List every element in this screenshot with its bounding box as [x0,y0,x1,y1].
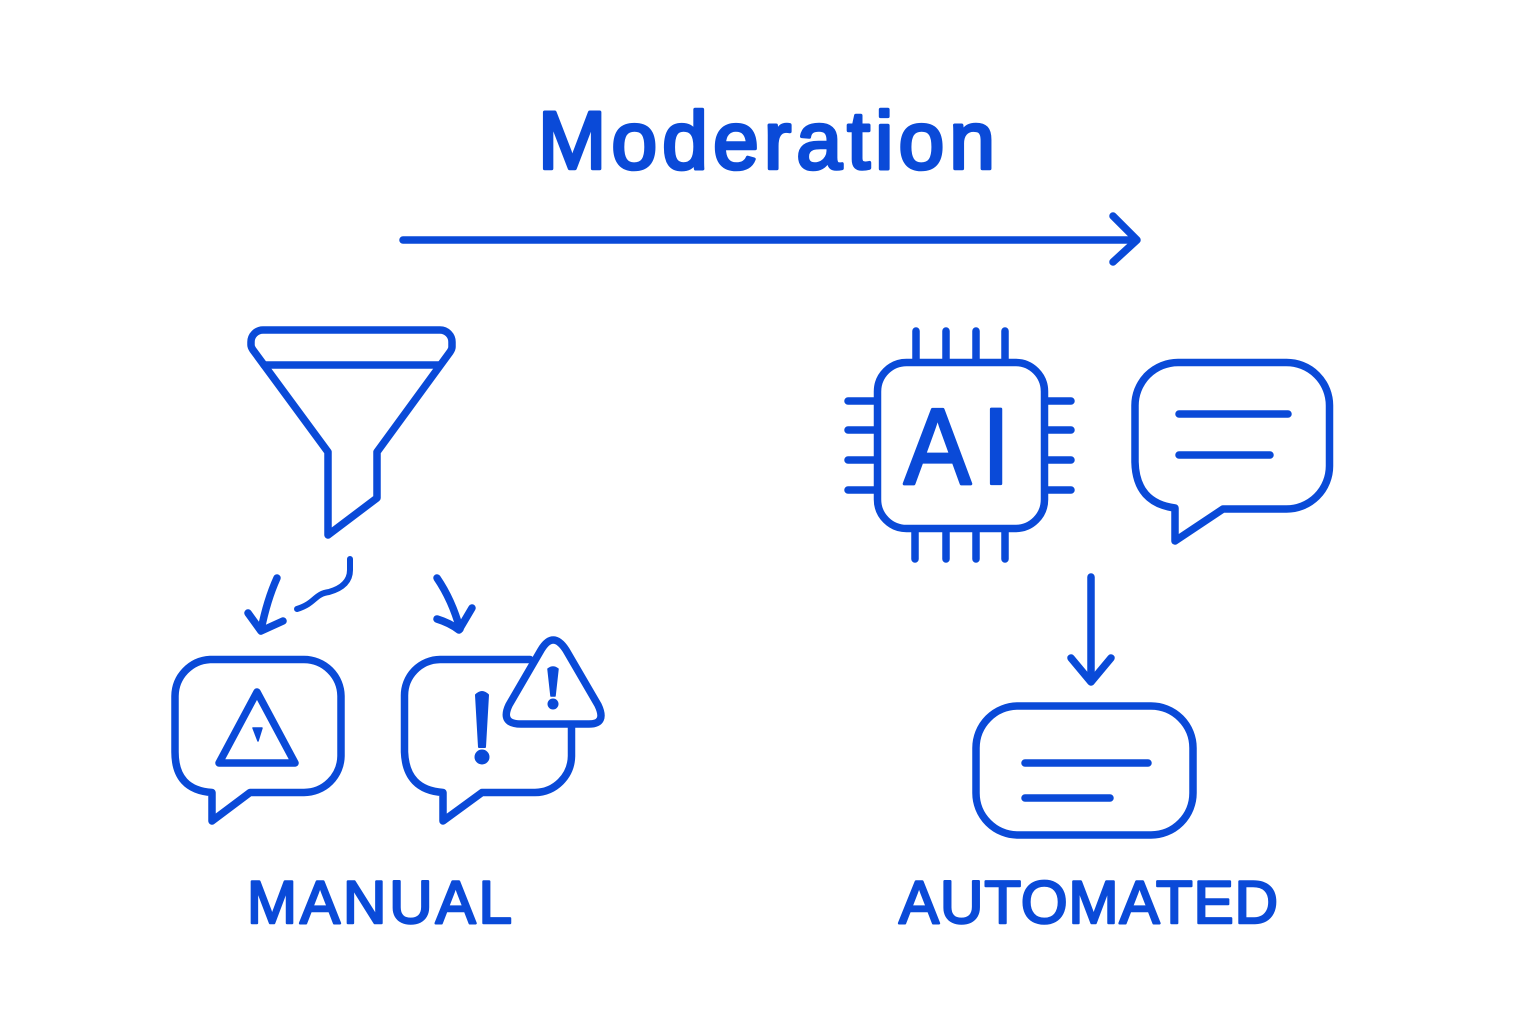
label: automated: AUTOMATED [899,869,1278,936]
icon: output message box [976,706,1193,835]
icon: funnel [251,330,452,535]
arrow: funnel to right bubble [437,578,472,630]
title: Moderation [538,95,995,186]
icon: exclamation speech bubble with warning badge [404,640,601,821]
arrow: AI to output [1071,577,1111,682]
label: manual: MANUAL [247,869,512,936]
arrow: manual to automated [403,216,1137,262]
icon: warning speech bubble [175,660,341,821]
arrow: funnel to left bubble [248,559,350,631]
chip label: AI [904,387,1021,507]
icon: speech bubble with lines [1135,362,1330,541]
icon: AI chip [848,331,1071,559]
